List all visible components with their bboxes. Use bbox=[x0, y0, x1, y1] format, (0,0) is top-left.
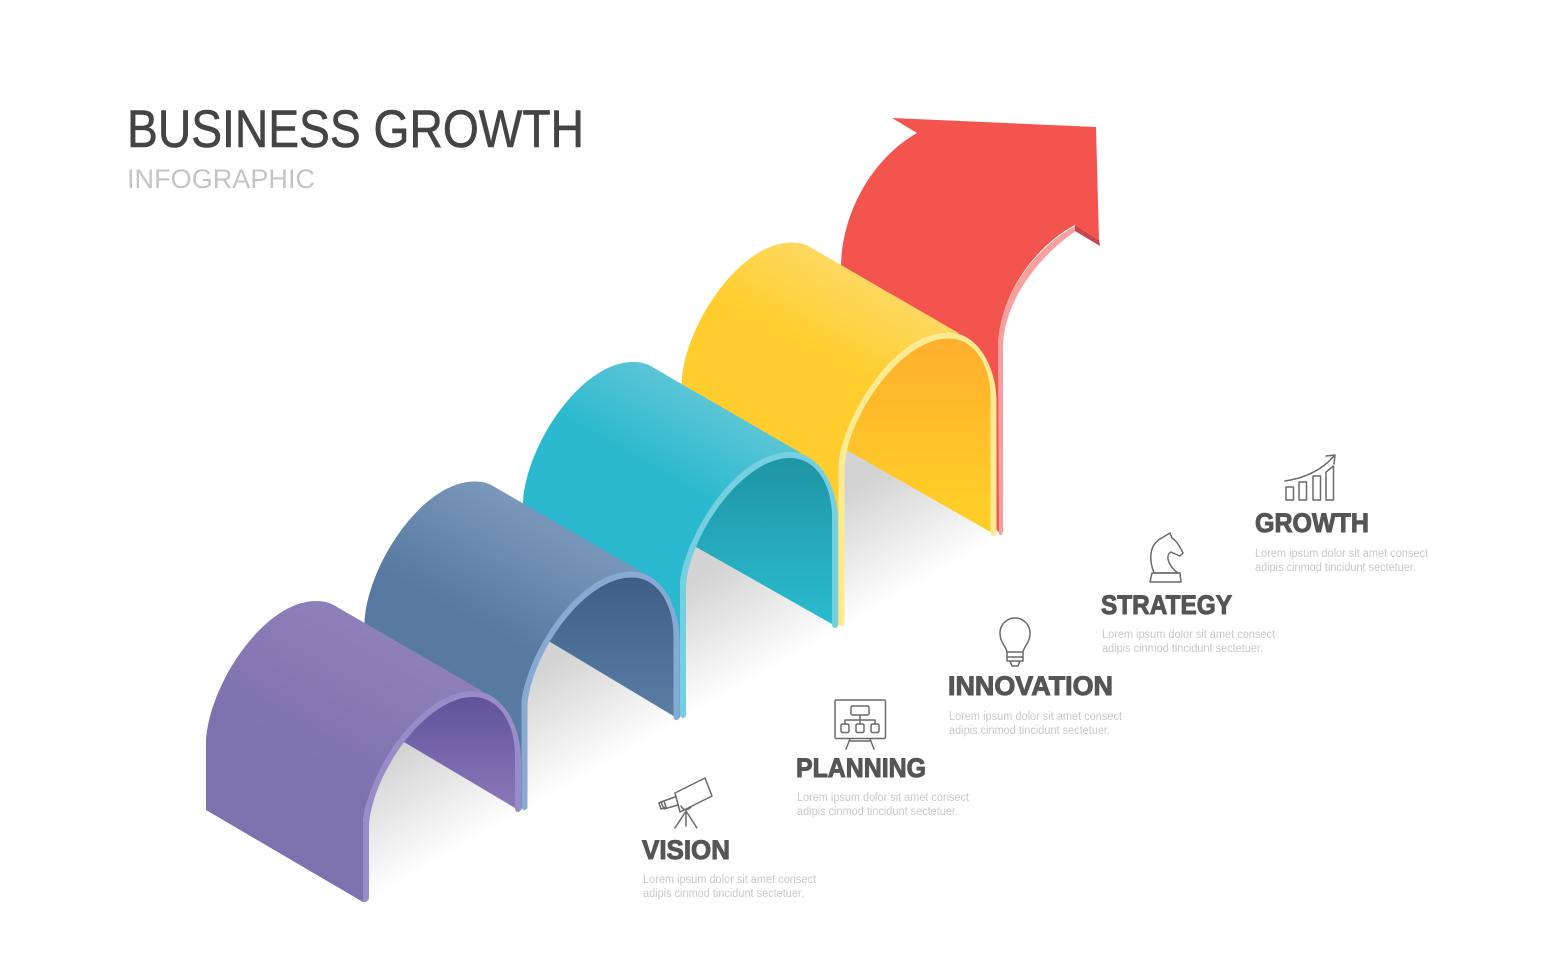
step: vision bbox=[642, 778, 817, 900]
step: planning bbox=[796, 700, 970, 818]
purple interior wall bbox=[380, 690, 519, 808]
step: growth bbox=[1255, 455, 1429, 574]
ground shadow bbox=[368, 330, 995, 902]
yellow outer surface bbox=[682, 242, 960, 626]
description: adipis cinmod tincidunt sectetuer. bbox=[643, 888, 804, 900]
label: INNOVATION bbox=[948, 671, 1113, 701]
label: PLANNING bbox=[796, 753, 926, 783]
arch: yellow bbox=[682, 242, 996, 626]
blue lip bbox=[522, 572, 680, 810]
description: adipis cinmod tincidunt sectetuer. bbox=[797, 806, 958, 818]
blue outer surface bbox=[364, 482, 642, 810]
description: adipis cinmod tincidunt sectetuer. bbox=[1255, 562, 1416, 574]
description: Lorem ipsum dolor sit amet consect bbox=[1102, 629, 1276, 641]
description: Lorem ipsum dolor sit amet consect bbox=[643, 874, 817, 886]
purple lip bbox=[363, 691, 521, 902]
arch: teal bbox=[523, 362, 838, 718]
arrow body bbox=[841, 118, 1099, 532]
arrow lip bbox=[998, 226, 1076, 535]
step: strategy bbox=[1101, 533, 1276, 655]
icon: telescope bbox=[659, 778, 712, 828]
label: VISION bbox=[642, 835, 730, 865]
title: BUSINESS GROWTH bbox=[127, 100, 584, 159]
arrowhead underside bbox=[1075, 225, 1100, 246]
icon: rising bar chart bbox=[1285, 455, 1335, 500]
teal interior wall bbox=[681, 451, 836, 624]
teal outer surface bbox=[523, 362, 801, 718]
arrow: red bbox=[841, 118, 1100, 535]
icon: chess knight bbox=[1150, 533, 1183, 582]
description: Lorem ipsum dolor sit amet consect bbox=[1255, 548, 1429, 560]
description: Lorem ipsum dolor sit amet consect bbox=[949, 711, 1123, 723]
icon: presentation board bbox=[835, 700, 886, 749]
yellow lip bbox=[838, 332, 996, 626]
arch: purple bbox=[206, 601, 521, 902]
description: Lorem ipsum dolor sit amet consect bbox=[797, 792, 970, 804]
blue interior wall bbox=[532, 570, 678, 716]
yellow interior wall bbox=[832, 332, 994, 532]
step: innovation bbox=[948, 618, 1123, 737]
description: adipis cinmod tincidunt sectetuer. bbox=[1102, 643, 1263, 655]
description: adipis cinmod tincidunt sectetuer. bbox=[949, 725, 1110, 737]
subtitle: INFOGRAPHIC bbox=[127, 164, 315, 194]
label: STRATEGY bbox=[1101, 590, 1232, 620]
label: GROWTH bbox=[1255, 508, 1369, 538]
icon: light bulb bbox=[1000, 618, 1030, 666]
teal lip bbox=[680, 452, 838, 718]
arch: blue bbox=[364, 482, 680, 810]
purple outer surface bbox=[206, 601, 484, 902]
